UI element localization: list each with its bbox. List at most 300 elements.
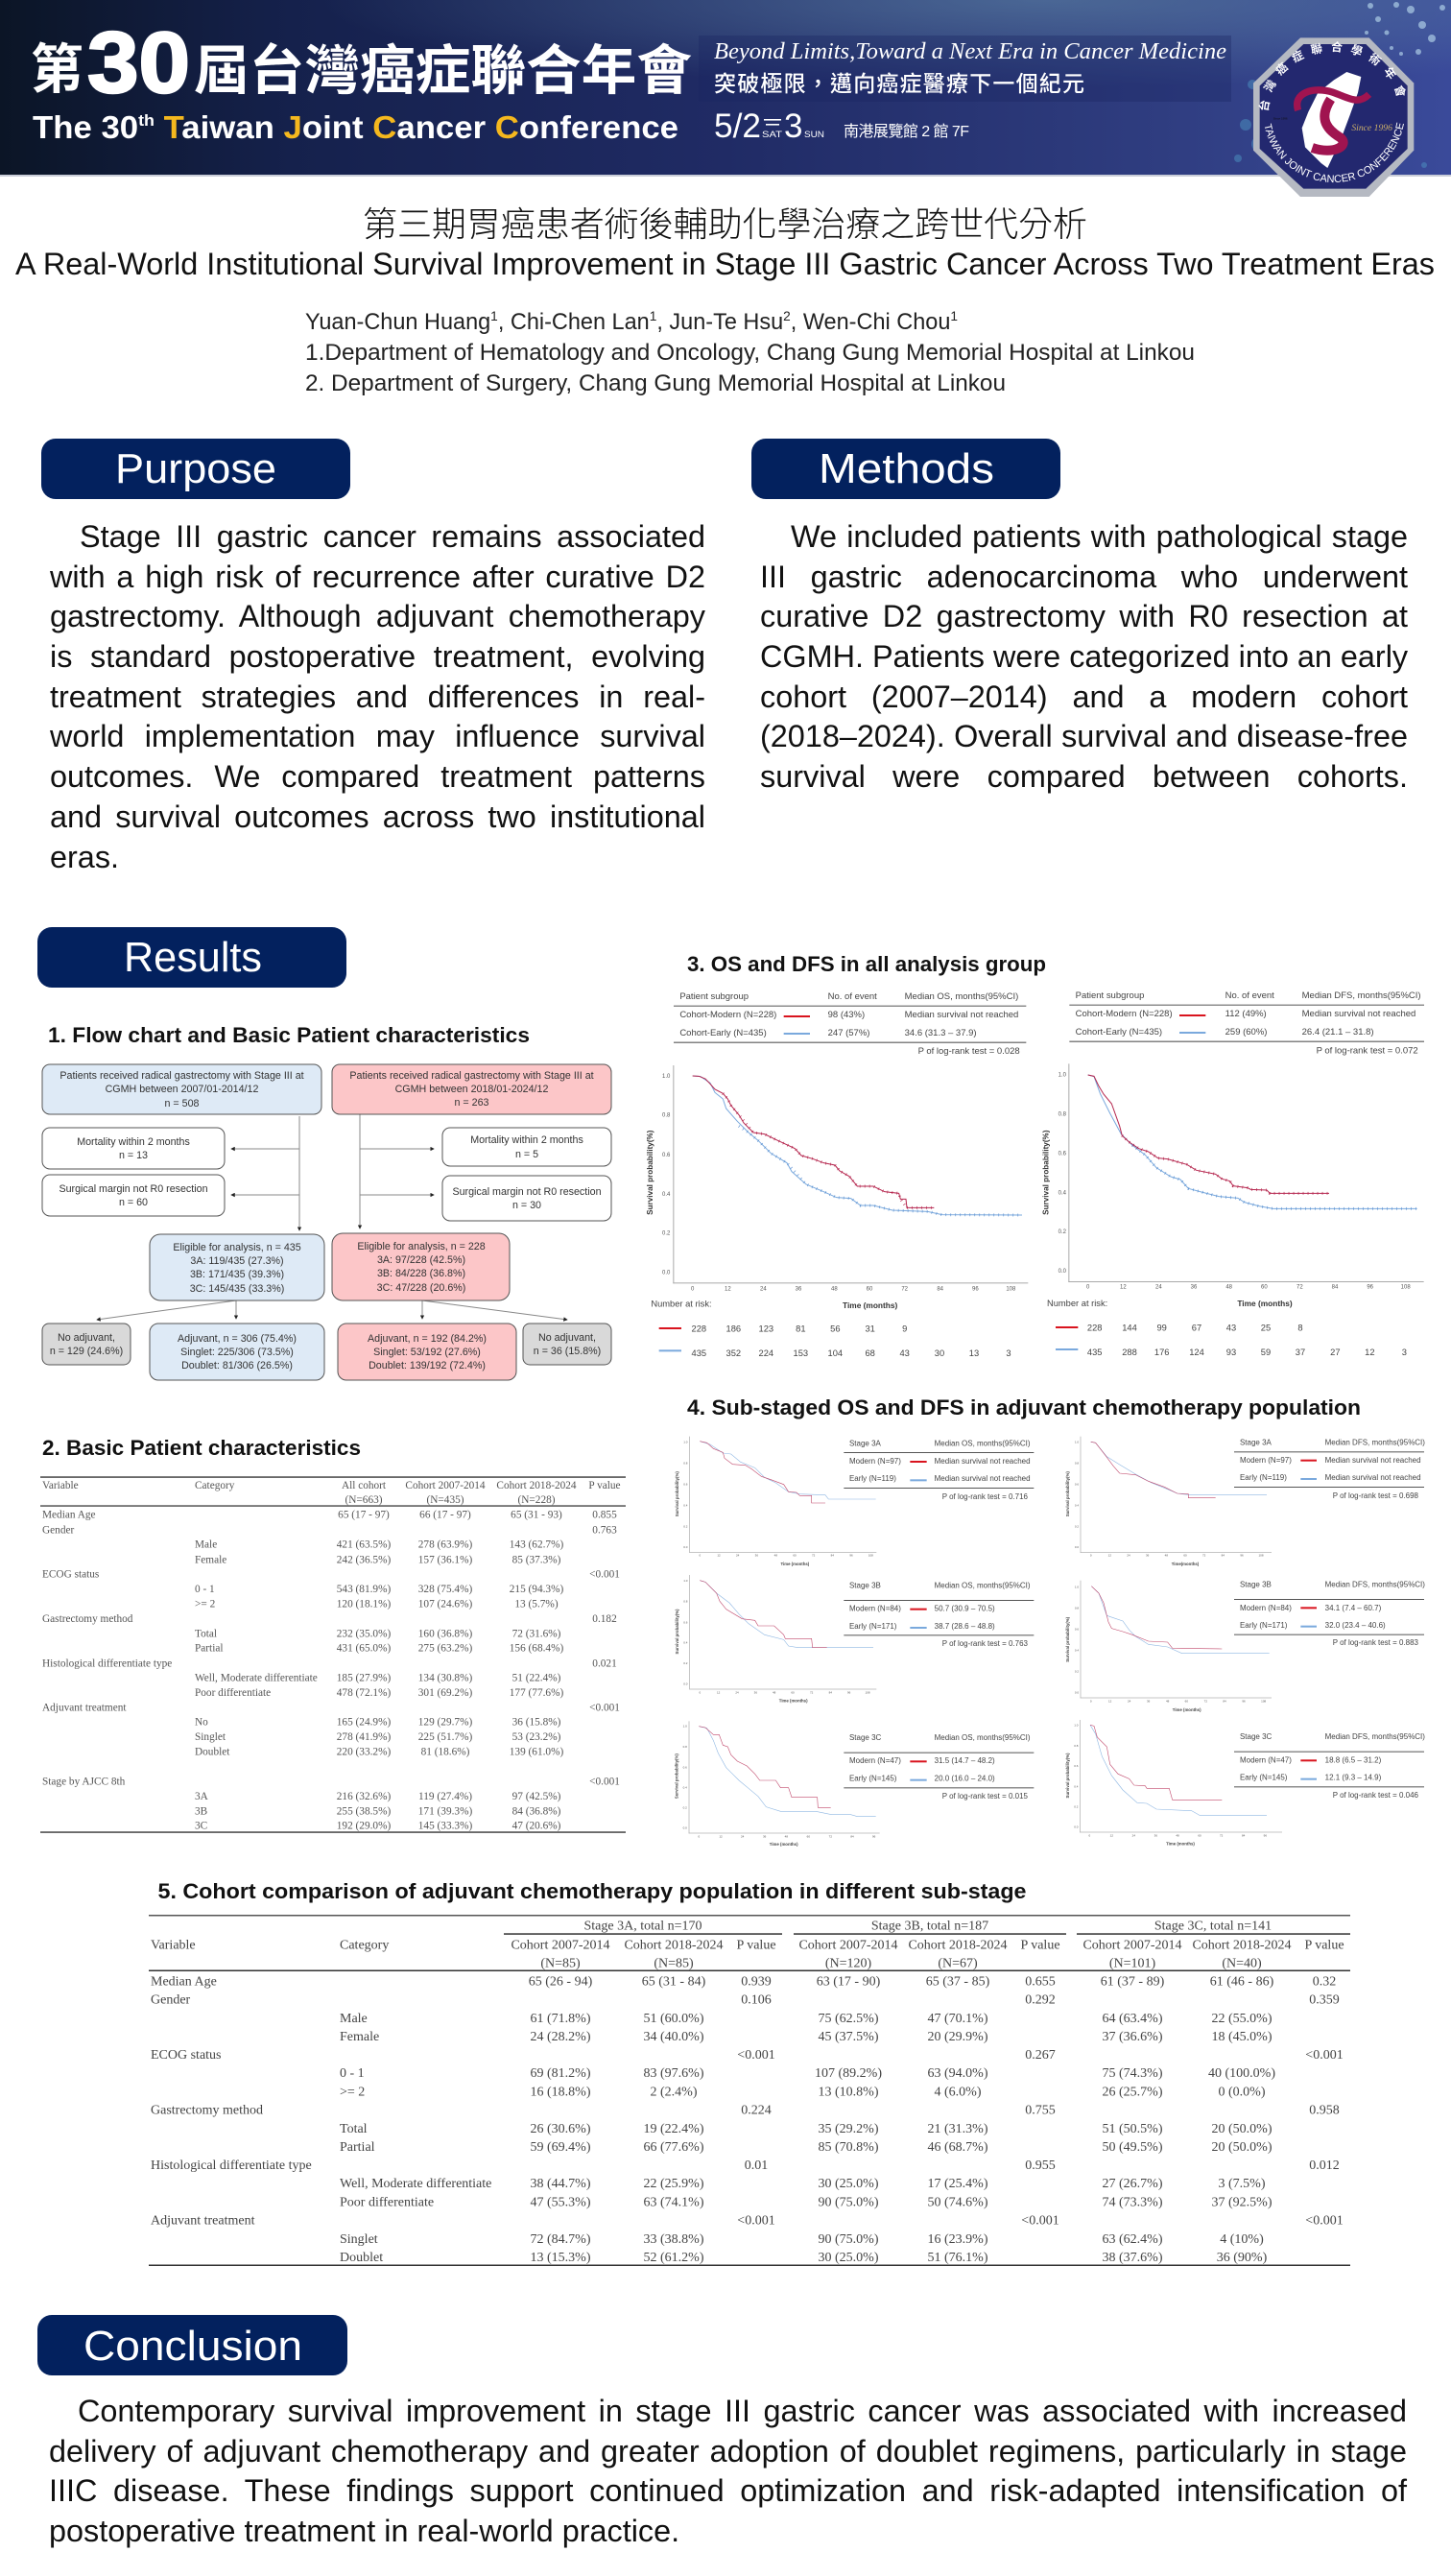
flow box labels: Adjuvant, n = 192 (84.2%) bbox=[368, 1333, 487, 1345]
OS stage 3C: 60 bbox=[807, 1834, 810, 1838]
DFS stage 3B: 72 bbox=[1204, 1700, 1207, 1704]
table 5 cells: 52 (61.2%) bbox=[643, 2251, 704, 2265]
OS stage 3B: 36 bbox=[754, 1691, 757, 1695]
OS stage 3C: 0.8 bbox=[683, 1745, 687, 1749]
OS summary table: Cohort-Early (N=435) bbox=[679, 1028, 767, 1038]
chart: overall survival all patients: Survival probability(%) bbox=[646, 1130, 654, 1215]
DFS stage 3B: Median DFS, months(95%CI) bbox=[1325, 1580, 1425, 1588]
flow box labels: n = 508 bbox=[165, 1098, 200, 1109]
DFS axis ticks: 0.0 bbox=[1059, 1269, 1067, 1275]
table 2 cells: Median Age bbox=[42, 1510, 96, 1521]
chart: disease-free survival all patients bbox=[1042, 990, 1424, 1357]
DFS stage 3C: Time (months) bbox=[1166, 1841, 1195, 1846]
OS axis ticks: 84 bbox=[937, 1286, 944, 1292]
OS stage 3C: 48 bbox=[785, 1834, 788, 1838]
table 5 cells: 0.01 bbox=[745, 2159, 768, 2173]
table 5 cells: 0.012 bbox=[1309, 2159, 1340, 2173]
logo: Since 1996 bbox=[1351, 123, 1392, 133]
text block: methods: CGMH. Patients were categorized into an early bbox=[760, 639, 1408, 674]
OS stage 3B: 0.4 bbox=[683, 1641, 688, 1645]
conference title chinese: 30 bbox=[87, 15, 190, 111]
panel 3 heading: 3. OS and DFS in all analysis group bbox=[687, 952, 1046, 976]
DFS numbers at risk: 435 bbox=[1087, 1348, 1102, 1357]
table 5 cells: P value bbox=[1020, 1939, 1060, 1952]
table 2 cells: 97 (42.5%) bbox=[512, 1791, 561, 1802]
OS stage 3B: 0.0 bbox=[683, 1682, 688, 1686]
table 5 cells bbox=[151, 1920, 1344, 2265]
OS stage 3A bbox=[675, 1437, 1034, 1566]
DFS axis ticks: 60 bbox=[1261, 1285, 1268, 1291]
DFS stage 3B: Time (months) bbox=[1173, 1707, 1201, 1712]
text block: purpose: Stage III gastric cancer remains associated bbox=[80, 519, 705, 554]
DFS stage 3C: 0.2 bbox=[1074, 1804, 1079, 1808]
OS stage 3A: Early (N=119) bbox=[849, 1474, 896, 1483]
table 5 cells: 20 (29.9%) bbox=[927, 2030, 988, 2044]
DFS numbers at risk: 27 bbox=[1330, 1348, 1341, 1357]
OS stage 3C: 0.0 bbox=[683, 1826, 687, 1830]
OS stage 3C: 12 bbox=[719, 1834, 723, 1838]
OS stage 3C: 0.4 bbox=[683, 1785, 687, 1789]
chart: disease-free survival all patients: Survival probability(%) bbox=[1042, 1130, 1051, 1215]
DFS stage 3C: P of log-rank test = 0.046 bbox=[1333, 1791, 1419, 1800]
DFS stage 3C: 0.4 bbox=[1074, 1784, 1079, 1788]
table 5 cells: Histological differentiate type bbox=[151, 2159, 312, 2173]
DFS stage 3B: 0.8 bbox=[1075, 1606, 1079, 1610]
conference title chinese: 屆台灣癌症聯合年會 bbox=[194, 40, 692, 101]
table 5 cells: Cohort 2007-2014 bbox=[798, 1939, 898, 1952]
table 5 cells: 66 (77.6%) bbox=[643, 2140, 704, 2155]
table 2 heading: 2. Basic Patient characteristics bbox=[42, 1436, 361, 1460]
table 2 cells: Stage by AJCC 8th bbox=[42, 1777, 126, 1788]
table 2 cells: 220 (33.2%) bbox=[337, 1747, 391, 1758]
OS stage 3C: Modern (N=47) bbox=[849, 1756, 901, 1765]
flow box labels: Patients received radical gastrectomy with Stage III at bbox=[349, 1070, 594, 1082]
heading: results: Results bbox=[124, 934, 262, 981]
table 2 cells: 275 (63.2%) bbox=[418, 1643, 472, 1655]
table 2 cells: 171 (39.3%) bbox=[418, 1805, 472, 1817]
table 2 cells: 51 (22.4%) bbox=[512, 1673, 561, 1684]
flow box labels: Patients received radical gastrectomy with Stage III at bbox=[59, 1070, 304, 1082]
DFS axis ticks: 36 bbox=[1191, 1285, 1198, 1291]
DFS curves bbox=[1088, 1075, 1417, 1208]
DFS stage 3A: Median survival not reached bbox=[1325, 1473, 1421, 1482]
table 5 cells: 0.359 bbox=[1309, 1992, 1340, 2008]
OS stage 3A: 0.6 bbox=[683, 1482, 688, 1486]
date and venue: SUN bbox=[804, 130, 824, 139]
DFS stage 3C: 24 bbox=[1132, 1833, 1135, 1837]
DFS axis ticks: 0.6 bbox=[1059, 1151, 1067, 1157]
DFS axis ticks: 12 bbox=[1120, 1285, 1127, 1291]
OS summary table: 247 (57%) bbox=[828, 1028, 869, 1038]
text block: methods: III gastric adenocarcinoma who underwent bbox=[760, 560, 1408, 594]
OS summary table: Median survival not reached bbox=[905, 1010, 1018, 1020]
table 2 cells: 215 (94.3%) bbox=[510, 1584, 563, 1595]
OS numbers at risk: 68 bbox=[865, 1348, 875, 1358]
table 5 cells: Cohort 2018-2024 bbox=[908, 1939, 1008, 1952]
table 2 cells: 134 (30.8%) bbox=[418, 1673, 472, 1684]
heading: conclusion bbox=[37, 2315, 347, 2375]
DFS axis ticks: 96 bbox=[1367, 1285, 1374, 1291]
table 2 cells: 47 (20.6%) bbox=[512, 1821, 561, 1832]
OS stage 3B: 96 bbox=[847, 1691, 851, 1695]
table 2 cells: 143 (62.7%) bbox=[510, 1539, 563, 1551]
table 5 cells: 0.292 bbox=[1025, 1992, 1056, 2008]
table 5 cells: 65 (31 - 84) bbox=[642, 1975, 706, 1989]
DFS axis ticks: 84 bbox=[1332, 1285, 1339, 1291]
OS stage 3B: Stage 3B bbox=[849, 1581, 881, 1589]
authors and affiliations bbox=[305, 308, 1195, 396]
table 2 cells: Male bbox=[195, 1539, 217, 1551]
heading: purpose bbox=[41, 439, 350, 499]
OS stage 3A: Time (months) bbox=[780, 1562, 810, 1566]
DFS stage 3C: 18.8 (6.5 – 31.2) bbox=[1325, 1755, 1382, 1764]
flow box labels: CGMH between 2007/01-2014/12 bbox=[106, 1084, 258, 1095]
OS numbers at risk bbox=[651, 1300, 1011, 1358]
flow box labels: Singlet: 53/192 (27.6%) bbox=[373, 1347, 481, 1358]
OS stage 3C: 0.2 bbox=[683, 1805, 687, 1809]
table 5 cells: 51 (60.0%) bbox=[643, 2012, 704, 2026]
authors and affiliations: Yuan-Chun Huang bbox=[305, 309, 494, 335]
DFS numbers at risk: 93 bbox=[1226, 1348, 1236, 1357]
table 5 cells: 46 (68.7%) bbox=[927, 2140, 988, 2155]
slogan panel bbox=[699, 36, 1231, 102]
OS numbers at risk: 31 bbox=[865, 1324, 875, 1333]
table 5 cells: 61 (46 - 86) bbox=[1210, 1975, 1274, 1989]
OS stage 3B: 60 bbox=[791, 1691, 795, 1695]
table 5 cells: 2 (2.4%) bbox=[651, 2085, 698, 2100]
DFS stage 3B: 36 bbox=[1147, 1700, 1151, 1704]
DFS stage 3A: 0.6 bbox=[1075, 1483, 1079, 1487]
table 2 cells: 478 (72.1%) bbox=[337, 1687, 391, 1699]
flow box labels: n = 60 bbox=[119, 1197, 148, 1208]
OS stage 3A: 0.2 bbox=[683, 1524, 688, 1528]
DFS stage 3C: 48 bbox=[1176, 1833, 1179, 1837]
DFS stage 3A bbox=[1065, 1437, 1425, 1566]
table 5 cells: Stage 3B, total n=187 bbox=[871, 1920, 988, 1933]
DFS numbers at risk: 37 bbox=[1296, 1348, 1305, 1357]
authors and affiliations: , Wen-Chi Chou bbox=[791, 309, 950, 335]
table 5 cells: 85 (70.8%) bbox=[818, 2140, 879, 2155]
table 2 cells: Histological differentiate type bbox=[42, 1658, 172, 1669]
table 5 cells: 20 (50.0%) bbox=[1211, 2122, 1273, 2136]
OS axis ticks: 96 bbox=[972, 1286, 979, 1292]
text block: conclusion bbox=[49, 2394, 1407, 2548]
DFS stage 3B: 1.0 bbox=[1075, 1585, 1079, 1588]
DFS numbers at risk: Number at risk: bbox=[1047, 1299, 1107, 1308]
table 5 cells: 90 (75.0%) bbox=[818, 2196, 879, 2209]
DFS summary table: 112 (49%) bbox=[1225, 1009, 1267, 1019]
table 2 cells: (N=228) bbox=[518, 1494, 556, 1506]
OS stage 3B: Time (months) bbox=[779, 1698, 808, 1703]
OS axis ticks bbox=[662, 1074, 1016, 1292]
heading: results bbox=[37, 927, 346, 988]
table 5 cells: 50 (74.6%) bbox=[927, 2196, 988, 2209]
DFS stage 3A: Survival probability(%) bbox=[1065, 1471, 1070, 1516]
OS stage 3B: 24 bbox=[735, 1691, 739, 1695]
table 5 cells: 63 (94.0%) bbox=[927, 2066, 988, 2081]
DFS stage 3C: 0.0 bbox=[1074, 1825, 1079, 1829]
table 2 cells: 165 (24.9%) bbox=[337, 1717, 391, 1729]
table 5 cells: 0.755 bbox=[1025, 2104, 1056, 2117]
logo: TAIWAN JOINT CANCER CONFERENCE bbox=[1265, 123, 1404, 182]
table 2 cells: 543 (81.9%) bbox=[337, 1584, 391, 1595]
table 5 cells: P value bbox=[1304, 1939, 1344, 1952]
table 5 cells: 63 (62.4%) bbox=[1102, 2232, 1163, 2247]
text block: purpose bbox=[50, 519, 705, 873]
DFS axis ticks: 48 bbox=[1225, 1285, 1233, 1291]
table 5 cells: 64 (63.4%) bbox=[1102, 2012, 1163, 2026]
DFS stage 3B: 24 bbox=[1128, 1700, 1131, 1704]
authors and affiliations: , Chi-Chen Lan bbox=[498, 309, 650, 335]
text block: methods bbox=[760, 519, 1408, 794]
table 5 cells: 34 (40.0%) bbox=[643, 2030, 704, 2044]
OS stage 3B: 0.6 bbox=[683, 1620, 688, 1624]
table 2 cells: 431 (65.0%) bbox=[337, 1643, 391, 1655]
DFS stage 3C: 12.1 (9.3 – 14.9) bbox=[1325, 1773, 1382, 1781]
header banner bbox=[0, 0, 1451, 197]
date and venue: 5/2 bbox=[714, 107, 761, 145]
table 5 cells: Partial bbox=[340, 2140, 375, 2155]
table 5 cells: 69 (81.2%) bbox=[530, 2066, 591, 2081]
OS numbers at risk: 104 bbox=[828, 1348, 843, 1358]
DFS stage 3B: 12 bbox=[1108, 1700, 1112, 1704]
DFS summary table: P of log-rank test = 0.072 bbox=[1317, 1045, 1418, 1056]
flow box labels: 3A: 119/435 (27.3%) bbox=[190, 1255, 284, 1267]
table 2 cells: <0.001 bbox=[589, 1777, 620, 1788]
table 5 cells: 75 (74.3%) bbox=[1102, 2066, 1163, 2081]
text block: conclusion: Contemporary survival improvement in stage III gastric cancer was associated with increased bbox=[78, 2394, 1407, 2428]
table 5 cells: 65 (26 - 94) bbox=[529, 1975, 593, 1989]
DFS stage 3B: 48 bbox=[1166, 1700, 1170, 1704]
date and venue: SAT bbox=[762, 130, 783, 139]
DFS stage 3B: 0.6 bbox=[1075, 1627, 1079, 1631]
table 5 cells: 63 (74.1%) bbox=[643, 2196, 704, 2209]
table 2 cells: Gender bbox=[42, 1524, 74, 1536]
table 2 cells: 139 (61.0%) bbox=[510, 1747, 563, 1758]
table 5 cells: (N=120) bbox=[825, 1956, 871, 1971]
flow connector arrows bbox=[97, 1114, 567, 1320]
table 2 cells: 13 (5.7%) bbox=[514, 1598, 559, 1610]
table 5 cells: 19 (22.4%) bbox=[643, 2122, 704, 2136]
table 2 cells: (N=663) bbox=[345, 1494, 383, 1506]
OS summary table: Median OS, months(95%CI) bbox=[905, 991, 1018, 1002]
table 5 cells: 24 (28.2%) bbox=[530, 2030, 591, 2044]
table 2 cells: Total bbox=[195, 1628, 217, 1639]
charts: sub-staged overall survival bbox=[674, 1437, 1034, 1847]
table 2 cells: 216 (32.6%) bbox=[337, 1791, 391, 1802]
slogan panel: Beyond Limits,Toward a Next Era in Cancer Medicine bbox=[714, 39, 1226, 64]
DFS numbers at risk: 99 bbox=[1156, 1323, 1167, 1332]
OS stage 3B: 0.8 bbox=[683, 1600, 688, 1604]
OS stage 3C: 84 bbox=[850, 1834, 854, 1838]
text block: methods: curative D2 gastrectomy with R0 resection at bbox=[760, 599, 1408, 633]
table 5 cells: (N=67) bbox=[938, 1956, 978, 1971]
table 5 cells: 74 (73.3%) bbox=[1102, 2196, 1163, 2209]
flow boxes bbox=[42, 1064, 611, 1380]
table 5 cells: <0.001 bbox=[737, 2213, 775, 2229]
DFS numbers at risk: 3 bbox=[1402, 1348, 1407, 1357]
table 2 cells: 3B bbox=[195, 1805, 207, 1817]
flow box labels: n = 263 bbox=[455, 1097, 489, 1109]
table 5 cells: >= 2 bbox=[340, 2085, 365, 2100]
OS stage 3B: 48 bbox=[773, 1691, 776, 1695]
table 5 cells: 38 (44.7%) bbox=[530, 2177, 591, 2191]
OS stage 3C: 31.5 (14.7 – 48.2) bbox=[935, 1756, 995, 1765]
authors and affiliations: 1.Department of Hematology and Oncology, Chang Gung Memorial Hospital at Linkou bbox=[305, 340, 1195, 366]
OS summary table: Patient subgroup bbox=[679, 991, 749, 1002]
title chinese: 第三期胃癌患者術後輔助化學治療之跨世代分析 bbox=[363, 204, 1087, 244]
table 5 cells: 47 (70.1%) bbox=[927, 2012, 988, 2026]
table 5 cells: P value bbox=[736, 1939, 776, 1952]
table 5 cells: 27 (26.7%) bbox=[1102, 2177, 1163, 2191]
table 5 cells: Cohort 2018-2024 bbox=[624, 1939, 724, 1952]
DFS stage 3C: 96 bbox=[1264, 1833, 1267, 1837]
table 2 cells: Singlet bbox=[195, 1731, 226, 1743]
table 5 cells: 37 (36.6%) bbox=[1102, 2030, 1163, 2044]
table 5 cells: 17 (25.4%) bbox=[927, 2177, 988, 2191]
OS stage 3A: 0.4 bbox=[683, 1503, 688, 1507]
table 5 cells: 61 (37 - 89) bbox=[1101, 1975, 1165, 1989]
OS axis ticks: 0.6 bbox=[662, 1153, 671, 1158]
table 5 cells: 0.267 bbox=[1025, 2048, 1056, 2063]
DFS stage 3C: 60 bbox=[1198, 1833, 1201, 1837]
OS numbers at risk: 435 bbox=[692, 1348, 706, 1358]
chart: overall survival all patients: Time (months) bbox=[843, 1300, 897, 1310]
flow box labels bbox=[50, 1070, 602, 1371]
table 5 cells: <0.001 bbox=[737, 2048, 775, 2063]
conference title english: The 30 bbox=[33, 109, 133, 145]
OS numbers at risk: 224 bbox=[759, 1348, 773, 1358]
table 5 cells: 83 (97.6%) bbox=[643, 2066, 704, 2081]
OS stage 3B: 0.2 bbox=[683, 1661, 688, 1665]
DFS stage 3C: Modern (N=47) bbox=[1240, 1755, 1292, 1764]
table 2 cells: 81 (18.6%) bbox=[421, 1747, 470, 1758]
table 5 cells: 22 (25.9%) bbox=[643, 2177, 704, 2191]
table 5 cells: (N=85) bbox=[540, 1956, 581, 1971]
OS stage 3C: 0.6 bbox=[683, 1765, 687, 1769]
DFS stage 3B: 0 bbox=[1090, 1700, 1092, 1704]
OS numbers at risk: 123 bbox=[759, 1324, 773, 1333]
table 5 cells: 63 (17 - 90) bbox=[817, 1975, 881, 1989]
table 2 cells: Well, Moderate differentiate bbox=[195, 1673, 318, 1684]
OS axis ticks: 0.8 bbox=[662, 1113, 671, 1119]
table 2 cells: (N=435) bbox=[426, 1494, 464, 1506]
OS summary table: Cohort-Modern (N=228) bbox=[679, 1010, 776, 1020]
DFS axis ticks: 72 bbox=[1296, 1285, 1303, 1291]
flow box labels: Surgical margin not R0 resection bbox=[452, 1186, 602, 1198]
table 5 cells: 18 (45.0%) bbox=[1211, 2030, 1273, 2044]
OS summary table: 98 (43%) bbox=[828, 1010, 865, 1020]
flow box labels: Eligible for analysis, n = 435 bbox=[173, 1242, 301, 1253]
chart: disease-free survival all patients: Time (months) bbox=[1237, 1299, 1293, 1308]
DFS stage 3C: 72 bbox=[1220, 1833, 1224, 1837]
table 2 cells: No bbox=[195, 1717, 208, 1729]
table 2 cells: Cohort 2007-2014 bbox=[405, 1480, 486, 1491]
OS stage 3C: 72 bbox=[829, 1834, 832, 1838]
DFS stage 3A: Stage 3A bbox=[1240, 1438, 1273, 1446]
OS stage 3C: 1.0 bbox=[683, 1725, 687, 1729]
date and venue: 3 bbox=[784, 107, 802, 145]
OS stage 3C: Survival probability(%) bbox=[674, 1753, 678, 1799]
DFS stage 3A: 60 bbox=[1183, 1554, 1187, 1558]
table 2 cells: 255 (38.5%) bbox=[337, 1805, 391, 1817]
DFS axis ticks: 0.4 bbox=[1059, 1190, 1067, 1196]
OS stage 3A: Survival probability(%) bbox=[675, 1471, 679, 1516]
DFS stage 3A: Modern (N=97) bbox=[1240, 1456, 1292, 1465]
DFS stage 3A: 0.4 bbox=[1075, 1503, 1079, 1507]
DFS stage 3A: 108 bbox=[1259, 1554, 1264, 1558]
DFS numbers at risk: 288 bbox=[1122, 1348, 1137, 1357]
table 5 cells: 61 (71.8%) bbox=[530, 2012, 591, 2026]
flow box labels: Mortality within 2 months bbox=[77, 1136, 190, 1148]
DFS stage 3A: Early (N=119) bbox=[1240, 1473, 1287, 1482]
text block: purpose: outcomes. We compared treatment patterns bbox=[50, 759, 705, 794]
OS stage 3B: 50.7 (30.9 – 70.5) bbox=[935, 1604, 995, 1612]
table 5 cells: Male bbox=[340, 2012, 368, 2026]
table 2 cells: 65 (17 - 97) bbox=[338, 1510, 390, 1521]
table 2 cells: >= 2 bbox=[195, 1598, 216, 1610]
OS stage 3A: 0.8 bbox=[683, 1461, 688, 1465]
DFS numbers at risk: 124 bbox=[1189, 1348, 1204, 1357]
DFS stage 3C: 12 bbox=[1110, 1833, 1113, 1837]
OS numbers at risk: 352 bbox=[726, 1348, 741, 1358]
flow box labels: 3A: 97/228 (42.5%) bbox=[377, 1254, 465, 1266]
table 5 cells: 0.955 bbox=[1025, 2159, 1056, 2173]
OS stage 3A: 108 bbox=[868, 1554, 873, 1558]
table 5 cells: 22 (55.0%) bbox=[1211, 2012, 1273, 2026]
table 5 cells: Doublet bbox=[340, 2251, 383, 2265]
table 5 cells: 20 (50.0%) bbox=[1211, 2140, 1273, 2155]
DFS axis ticks: 0 bbox=[1086, 1285, 1090, 1291]
table 2 cells: 36 (15.8%) bbox=[512, 1717, 561, 1729]
table 2 cells: 0 - 1 bbox=[195, 1584, 215, 1595]
text block: purpose: with a high risk of recurrence after curative D2 bbox=[50, 560, 705, 594]
OS stage 3B: 38.7 (28.6 – 48.8) bbox=[935, 1622, 995, 1631]
OS stage 3A: P of log-rank test = 0.716 bbox=[942, 1492, 1029, 1501]
table 2 cells: 156 (68.4%) bbox=[510, 1643, 563, 1655]
text block: methods: (2018–2024). Overall survival and disease-free bbox=[760, 719, 1408, 753]
table 2 cells: 328 (75.4%) bbox=[418, 1584, 472, 1595]
table 2 cells: 72 (31.6%) bbox=[512, 1628, 561, 1639]
OS stage 3C: Early (N=145) bbox=[849, 1774, 897, 1782]
table 2 cells: ECOG status bbox=[42, 1569, 99, 1581]
DFS stage 3B: 0.2 bbox=[1075, 1670, 1079, 1674]
text block: purpose: world implementation may influence survival bbox=[50, 719, 705, 753]
DFS axis ticks: 0.8 bbox=[1059, 1112, 1067, 1118]
table 2 cells: Poor differentiate bbox=[195, 1687, 271, 1699]
table 2 cells: Adjuvant treatment bbox=[42, 1702, 127, 1713]
text block: conclusion: postoperative treatment in real-world practice. bbox=[49, 2514, 679, 2548]
table 5 cells: 13 (15.3%) bbox=[530, 2251, 591, 2265]
OS summary table: No. of event bbox=[828, 991, 877, 1002]
table 5 cells: 0.106 bbox=[741, 1992, 772, 2008]
table 2 cells: <0.001 bbox=[589, 1569, 620, 1581]
DFS stage 3B: 60 bbox=[1185, 1700, 1188, 1704]
heading: methods: Methods bbox=[819, 445, 994, 492]
table 2 cells: 0.182 bbox=[592, 1613, 617, 1625]
flow box labels: Singlet: 225/306 (73.5%) bbox=[180, 1347, 294, 1358]
DFS stage 3B: 84 bbox=[1223, 1700, 1226, 1704]
DFS stage 3B: P of log-rank test = 0.883 bbox=[1333, 1638, 1419, 1647]
DFS stage 3A: Time(months) bbox=[1172, 1562, 1200, 1566]
DFS stage 3B: 0.0 bbox=[1075, 1691, 1079, 1695]
OS stage 3B: 108 bbox=[866, 1691, 870, 1695]
title english: A Real-World Institutional Survival Improvement in Stage III Gastric Cancer Across Two Treatment Eras bbox=[15, 247, 1435, 281]
authors and affiliations: 1 bbox=[650, 308, 657, 323]
authors and affiliations: , Jun-Te Hsu bbox=[656, 309, 783, 335]
text block: purpose: is standard postoperative treatment, evolving bbox=[50, 639, 705, 674]
DFS stage 3C bbox=[1065, 1720, 1425, 1846]
